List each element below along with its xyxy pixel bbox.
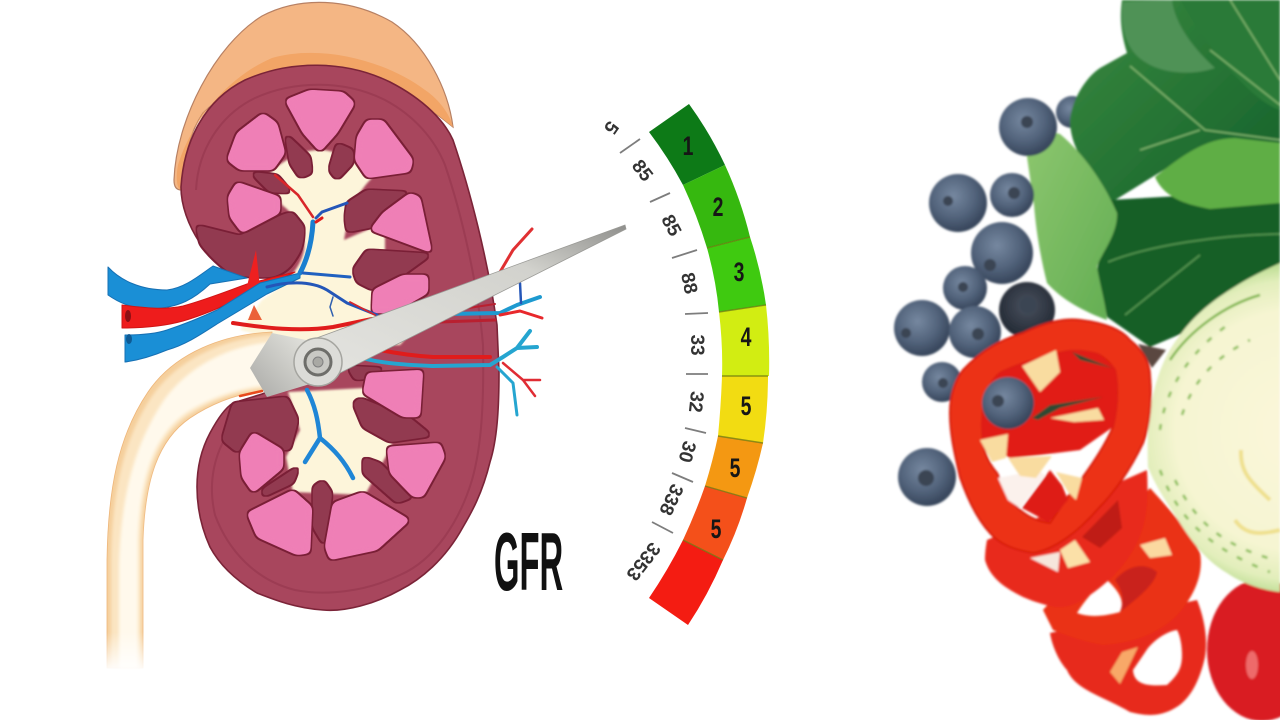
artery end — [125, 310, 131, 322]
blueberries — [894, 98, 1057, 506]
light leaf left — [1027, 133, 1117, 320]
needle arm — [303, 225, 626, 373]
scale labels: 32 — [684, 390, 707, 413]
back blueberry — [1056, 96, 1088, 128]
leaf veins — [1130, 0, 1280, 150]
band numbers: 5 — [730, 453, 740, 483]
renal vessels — [108, 175, 542, 478]
scale labels: 88 — [676, 271, 701, 296]
kidney — [181, 65, 499, 610]
spinach dark upper — [1070, 0, 1280, 205]
cabbage yellow folds — [1235, 450, 1280, 533]
ureter fade — [100, 632, 150, 672]
pepper ring 3 — [1043, 488, 1201, 645]
adrenal gland — [174, 2, 453, 190]
blueberry calyx marks — [901, 116, 1036, 486]
band 1 — [649, 104, 725, 185]
band 2 — [683, 165, 750, 248]
thin blue branches — [300, 222, 313, 273]
lower leaf veins — [1108, 234, 1280, 315]
tomato — [1207, 579, 1280, 720]
band numbers: 5 — [741, 391, 751, 421]
cream pieces — [980, 350, 1104, 500]
ureter — [107, 332, 272, 668]
pepper ring 4 — [1050, 600, 1206, 715]
spinach highlight — [1122, 0, 1215, 73]
band 6 — [705, 436, 763, 498]
vein end — [126, 334, 132, 344]
ring 3 inner — [1115, 566, 1157, 612]
scale labels — [599, 117, 707, 584]
cabbage outer rib — [1170, 295, 1260, 360]
scale labels: 5 — [599, 117, 622, 138]
renal pyramids — [227, 90, 445, 560]
spinach dark patch — [1180, 0, 1280, 110]
stem sliver — [1032, 397, 1103, 420]
renal sinus upper — [240, 150, 420, 345]
needle pivot — [294, 338, 342, 386]
ring 2 gap — [1030, 552, 1060, 572]
scale labels: 85 — [656, 211, 685, 240]
band 8 — [649, 540, 723, 625]
inner cortex shade — [196, 85, 483, 593]
adrenal lower band — [177, 53, 453, 190]
right side upper vessels — [440, 320, 495, 322]
ring 1 inner red fill — [982, 351, 1117, 458]
red thin branches — [275, 175, 313, 217]
kidney body — [181, 65, 499, 610]
band numbers: 1 — [683, 131, 693, 161]
ureter core — [119, 342, 272, 668]
red spur — [246, 250, 260, 290]
scale labels: 338 — [654, 481, 687, 518]
ring 2 inner — [1082, 500, 1122, 548]
lower kidney vein — [305, 390, 353, 478]
renal vein upper tube — [108, 266, 247, 309]
ring 1 white gap — [998, 470, 1045, 508]
band numbers: 4 — [741, 322, 751, 352]
pepper stem shadow — [1138, 344, 1166, 368]
pepper ring 1 — [950, 320, 1151, 553]
band 3 — [707, 237, 766, 312]
dark inner top — [1072, 352, 1112, 368]
GFR label: GFR — [494, 516, 563, 608]
renal columns — [196, 133, 432, 547]
band numbers: 5 — [711, 514, 721, 544]
renal sinus lower — [286, 388, 392, 495]
ring 4 cream — [1110, 647, 1138, 684]
scale labels: 33 — [686, 334, 707, 356]
scale ticks — [620, 139, 708, 533]
GFR colour scale — [599, 104, 769, 625]
scale labels: 30 — [674, 439, 700, 465]
right side lower vessels — [380, 350, 490, 357]
blueberry on pepper — [982, 377, 1034, 429]
light leaf right — [1155, 138, 1280, 209]
cabbage — [1148, 263, 1280, 592]
ring 2 cream — [1060, 540, 1090, 568]
ring 1 inner red piece — [1022, 470, 1068, 522]
scale labels: 3353 — [622, 538, 664, 584]
needle base block — [250, 333, 310, 397]
food group — [894, 0, 1280, 720]
band 4 — [719, 305, 769, 376]
band 7 — [683, 486, 747, 560]
band dividers — [683, 237, 768, 560]
gauge needle — [250, 225, 626, 397]
scale labels: 85 — [627, 156, 657, 186]
band numbers: 2 — [713, 192, 723, 222]
ureter mid tone — [111, 335, 272, 668]
band 5 — [718, 376, 768, 443]
band numbers — [683, 131, 751, 544]
band numbers: 3 — [734, 257, 744, 287]
cabbage rib details — [1160, 322, 1275, 572]
lower vein tube — [125, 273, 300, 362]
renal artery — [122, 272, 295, 328]
spinach dark lower — [1097, 190, 1280, 347]
ring 3 cream — [1140, 538, 1172, 558]
pepper ring 2 — [985, 470, 1148, 607]
